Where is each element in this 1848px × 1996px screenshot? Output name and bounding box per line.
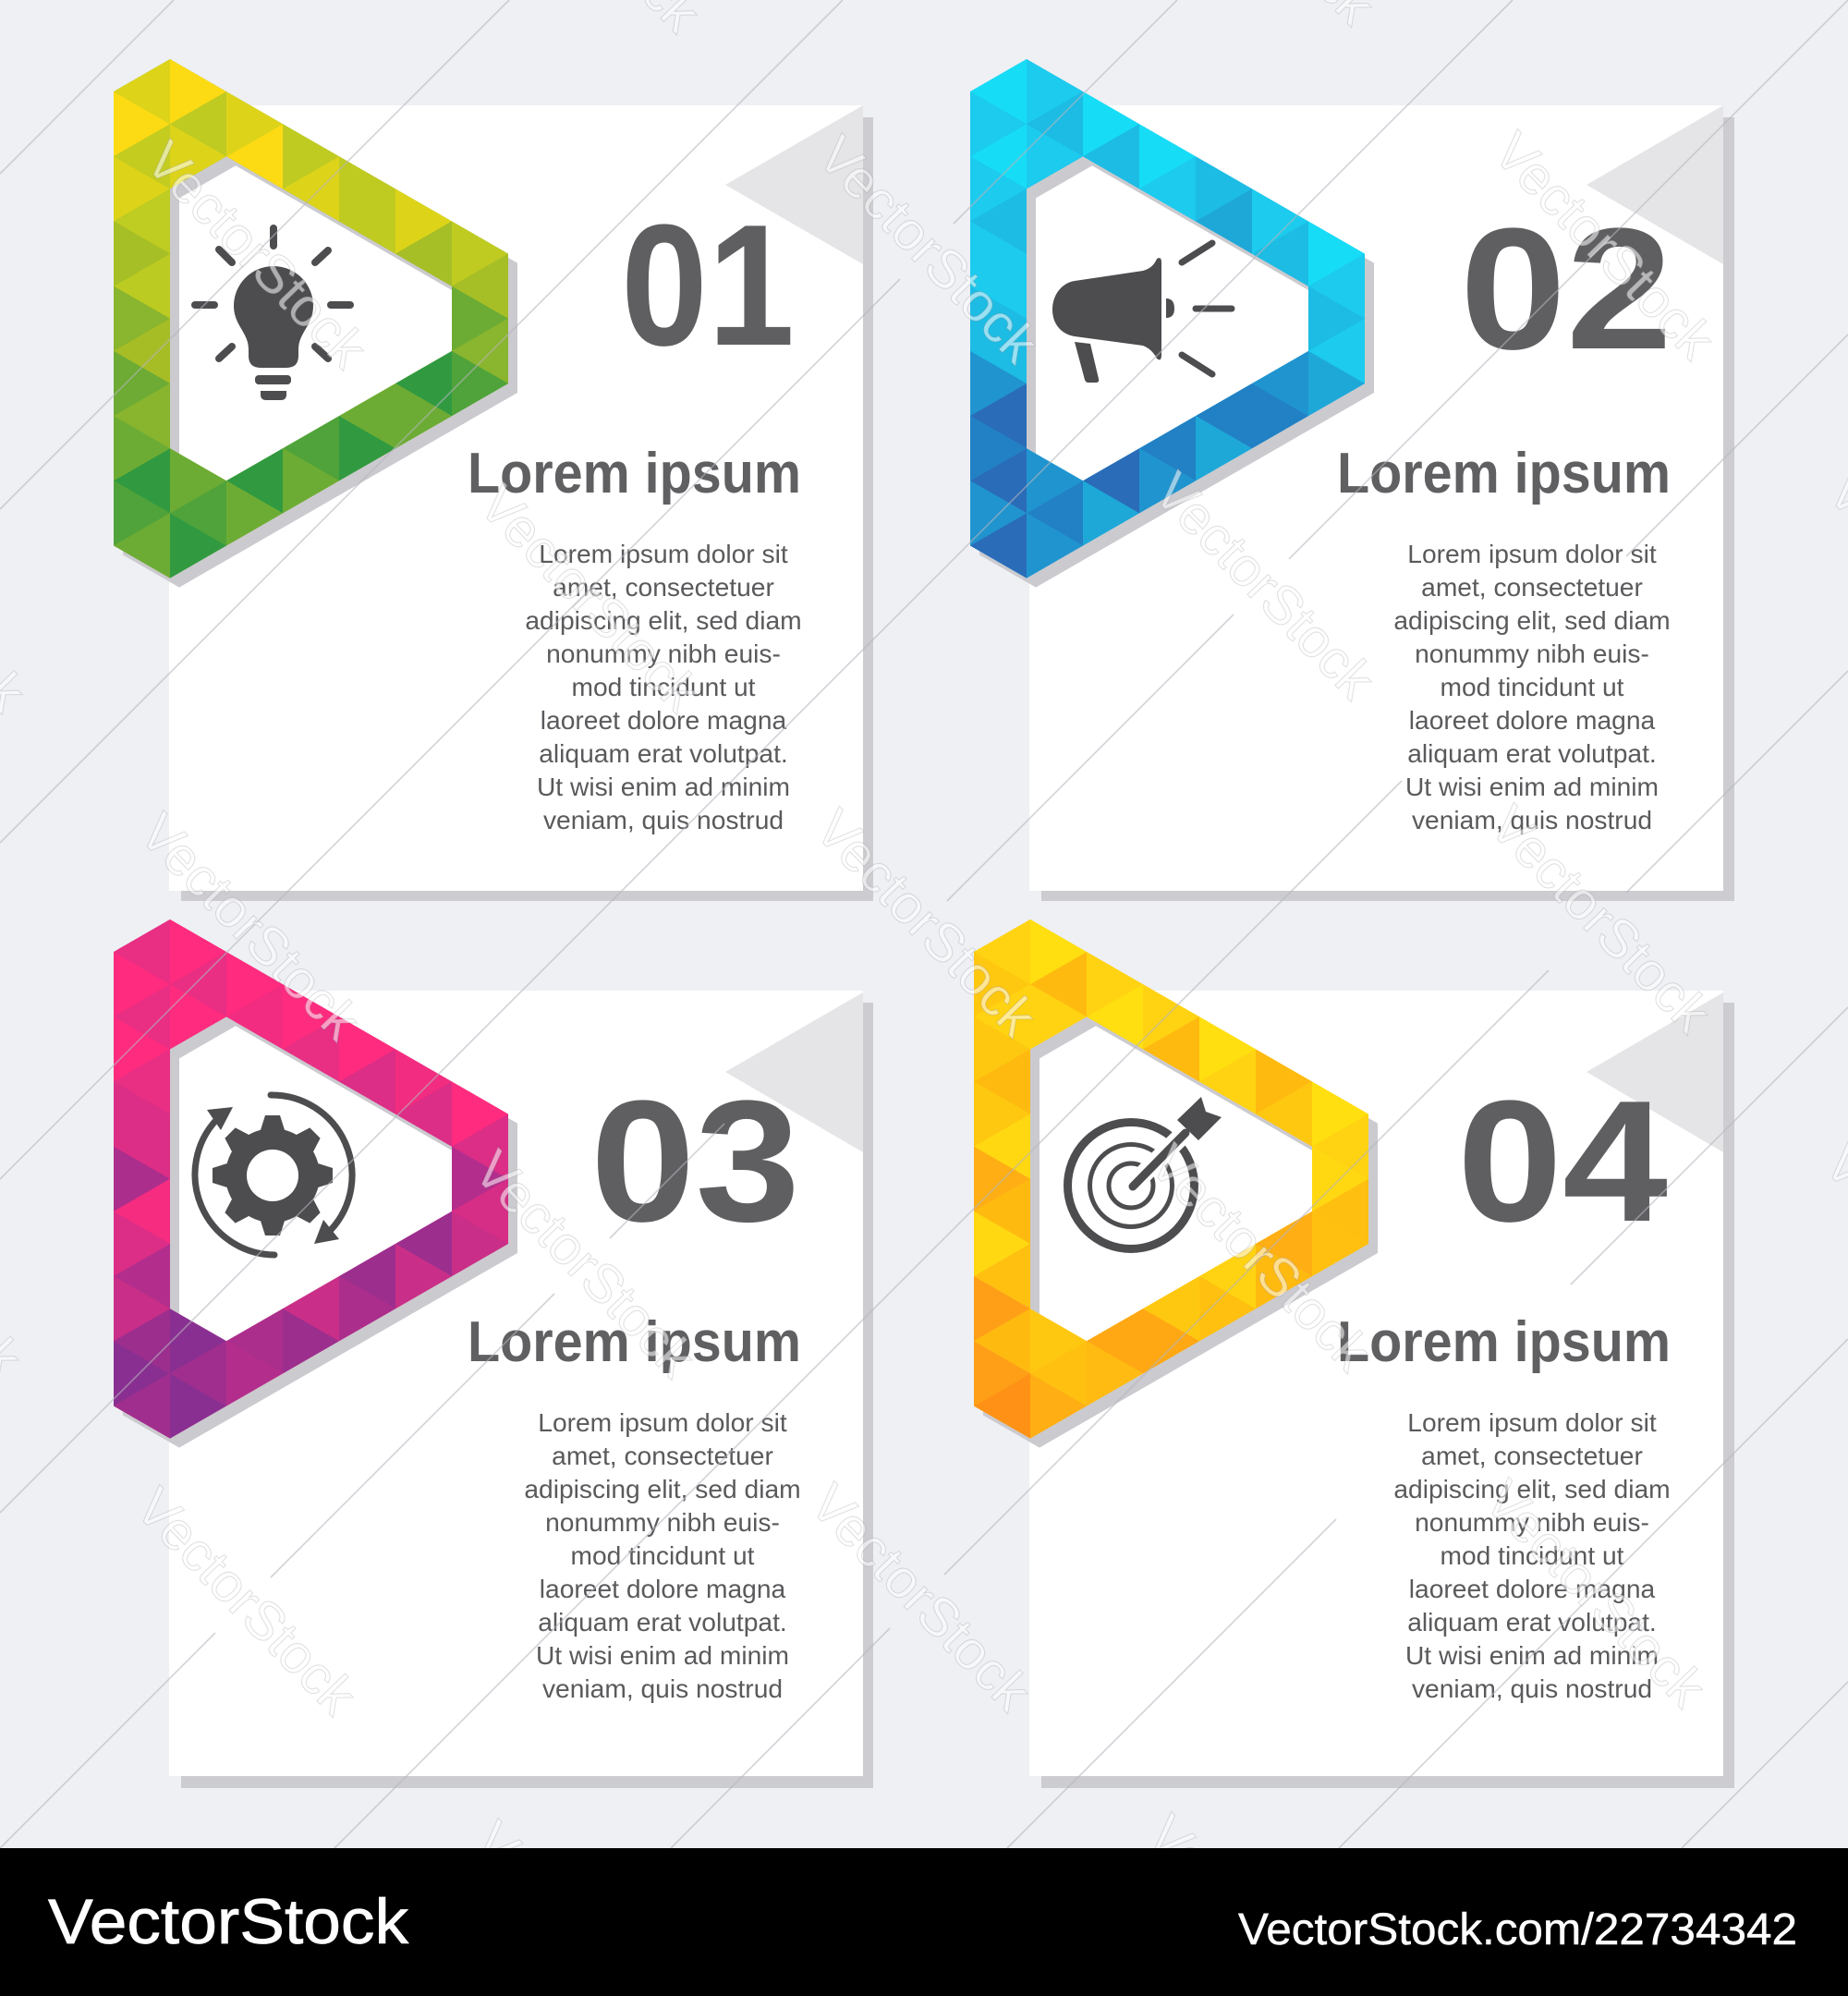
panel: card 02: [970, 59, 1734, 901]
watermark text: VectorStock: [798, 1473, 1042, 1722]
triangle frame: blue: [970, 59, 1374, 588]
text block: nonummy nibh euis-: [545, 1507, 780, 1537]
text block: nonummy nibh euis-: [546, 639, 781, 668]
text block: laoreet dolore magna: [1409, 705, 1656, 735]
text block: Lorem ipsum dolor sit: [539, 539, 788, 568]
watermark text: VectorStock: [1478, 795, 1722, 1044]
text block: mod tincidunt ut: [1440, 672, 1624, 701]
watermark text: VectorStock: [134, 130, 378, 380]
text block: adipiscing elit, sed diam: [1393, 1474, 1671, 1503]
watermark text: VectorStock: [463, 1139, 707, 1389]
text block: nonummy nibh euis-: [1415, 639, 1649, 668]
heading: Lorem ipsum: [1337, 1310, 1671, 1374]
text block: Lorem ipsum dolor sit: [1407, 539, 1657, 568]
text block: nonummy nibh euis-: [1415, 1507, 1649, 1537]
watermark text: VectorStock: [1482, 121, 1726, 371]
text block: aliquam erat volutpat.: [1407, 1607, 1657, 1637]
text block: adipiscing elit, sed diam: [525, 605, 802, 635]
text block: amet, consectetuer: [552, 1441, 773, 1470]
text block: adipiscing elit, sed diam: [524, 1474, 801, 1503]
text block: veniam, quis nostrud: [543, 805, 784, 834]
text block: veniam, quis nostrud: [1412, 1673, 1652, 1703]
triangle frame: green: [114, 59, 517, 588]
text block: laoreet dolore magna: [540, 1574, 786, 1603]
text block: veniam, quis nostrud: [542, 1673, 783, 1703]
text block: Lorem ipsum dolor sit: [538, 1407, 787, 1437]
watermark text: VectorStock: [1138, 1133, 1382, 1383]
number 01: 01: [621, 189, 795, 382]
text block: Ut wisi enim ad minim: [1405, 1640, 1659, 1670]
text block: Ut wisi enim ad minim: [537, 772, 790, 801]
watermark text: VectorStock: [1473, 1469, 1717, 1719]
watermark text: VectorStock: [1142, 461, 1386, 711]
text block: aliquam erat volutpat.: [539, 738, 788, 768]
text block: mod tincidunt ut: [1440, 1540, 1624, 1570]
triangle frame: magenta: [114, 919, 517, 1448]
text block: amet, consectetuer: [1421, 1441, 1643, 1470]
text block: mod tincidunt ut: [571, 672, 756, 701]
footer bar: [0, 1848, 1848, 1996]
text block: aliquam erat volutpat.: [1407, 738, 1657, 768]
icon: megaphone: [1052, 243, 1232, 383]
watermark text: VectorStock: [124, 1477, 368, 1726]
heading: Lorem ipsum: [468, 442, 801, 505]
text block: laoreet dolore magna: [541, 705, 787, 735]
text block: amet, consectetuer: [1421, 572, 1643, 602]
text block: amet, consectetuer: [553, 572, 774, 602]
panel: card 03: [114, 919, 873, 1788]
watermark text: VectorStock: [804, 798, 1048, 1048]
text block: Ut wisi enim ad minim: [536, 1640, 789, 1670]
heading: Lorem ipsum: [468, 1310, 801, 1374]
text block: laoreet dolore magna: [1409, 1574, 1656, 1603]
text block: adipiscing elit, sed diam: [1393, 605, 1671, 635]
text block: mod tincidunt ut: [571, 1540, 755, 1570]
icon: light bulb: [195, 228, 350, 400]
text block: aliquam erat volutpat.: [538, 1607, 787, 1637]
panel: card 01: [114, 59, 873, 901]
number 02: 02: [1460, 192, 1672, 385]
text block: Ut wisi enim ad minim: [1405, 772, 1659, 801]
footer url: VectorStock.com/22734342: [1238, 1905, 1797, 1954]
footer logo: VectorStock: [48, 1886, 409, 1957]
text block: Lorem ipsum dolor sit: [1407, 1407, 1657, 1437]
icon: target with arrow: [1068, 1097, 1222, 1249]
watermark text: VectorStock: [468, 474, 711, 724]
text block: veniam, quis nostrud: [1412, 805, 1652, 834]
watermark text: VectorStock: [128, 802, 372, 1052]
watermark text: VectorStock: [807, 125, 1051, 375]
panel: card 04: [974, 919, 1734, 1788]
heading: Lorem ipsum: [1337, 442, 1671, 505]
number 04: 04: [1457, 1065, 1668, 1258]
triangle frame: yellow: [974, 919, 1378, 1448]
number 03: 03: [590, 1065, 800, 1258]
icon: gear with rotating arrows: [195, 1095, 352, 1255]
